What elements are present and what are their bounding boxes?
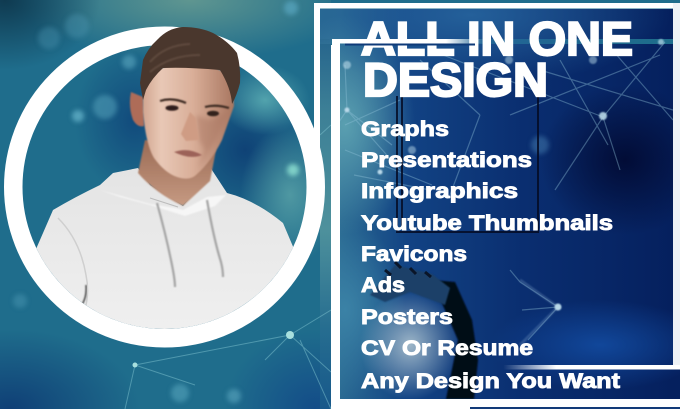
nose bbox=[181, 112, 199, 141]
ear bbox=[130, 92, 144, 126]
list of design services: Presentations bbox=[361, 149, 532, 172]
list of design services: Ads bbox=[361, 274, 405, 297]
neck bbox=[138, 140, 216, 206]
black monitor outline bbox=[397, 96, 538, 232]
hair bbox=[140, 27, 240, 104]
mouth bbox=[174, 150, 202, 157]
face shadow bbox=[196, 112, 228, 168]
drawstrings bbox=[157, 200, 223, 287]
outer frame left line bbox=[314, 3, 320, 173]
portrait: man in white hoodie bbox=[33, 27, 297, 340]
face bbox=[143, 58, 234, 179]
white frames bbox=[320, 3, 680, 409]
hoodie bbox=[33, 167, 297, 340]
list of design services: Posters bbox=[361, 306, 453, 329]
list of design services: Youtube Thumbnails bbox=[361, 212, 613, 235]
ring around portrait bbox=[13, 36, 316, 338]
list of design services: Graphs bbox=[361, 118, 449, 141]
eyes and brows bbox=[160, 99, 229, 116]
list of design services: Infographics bbox=[361, 180, 518, 203]
list of design services bbox=[361, 118, 620, 393]
title: ALL IN ONE bbox=[361, 12, 633, 65]
robot hand silhouette bbox=[370, 262, 478, 399]
list of design services: Any Design You Want bbox=[361, 370, 620, 393]
title bbox=[361, 12, 633, 106]
title: DESIGN bbox=[363, 53, 548, 106]
list of design services: CV Or Resume bbox=[361, 337, 533, 360]
panel: right design list background bbox=[320, 9, 680, 399]
list of design services: Favicons bbox=[361, 243, 467, 266]
